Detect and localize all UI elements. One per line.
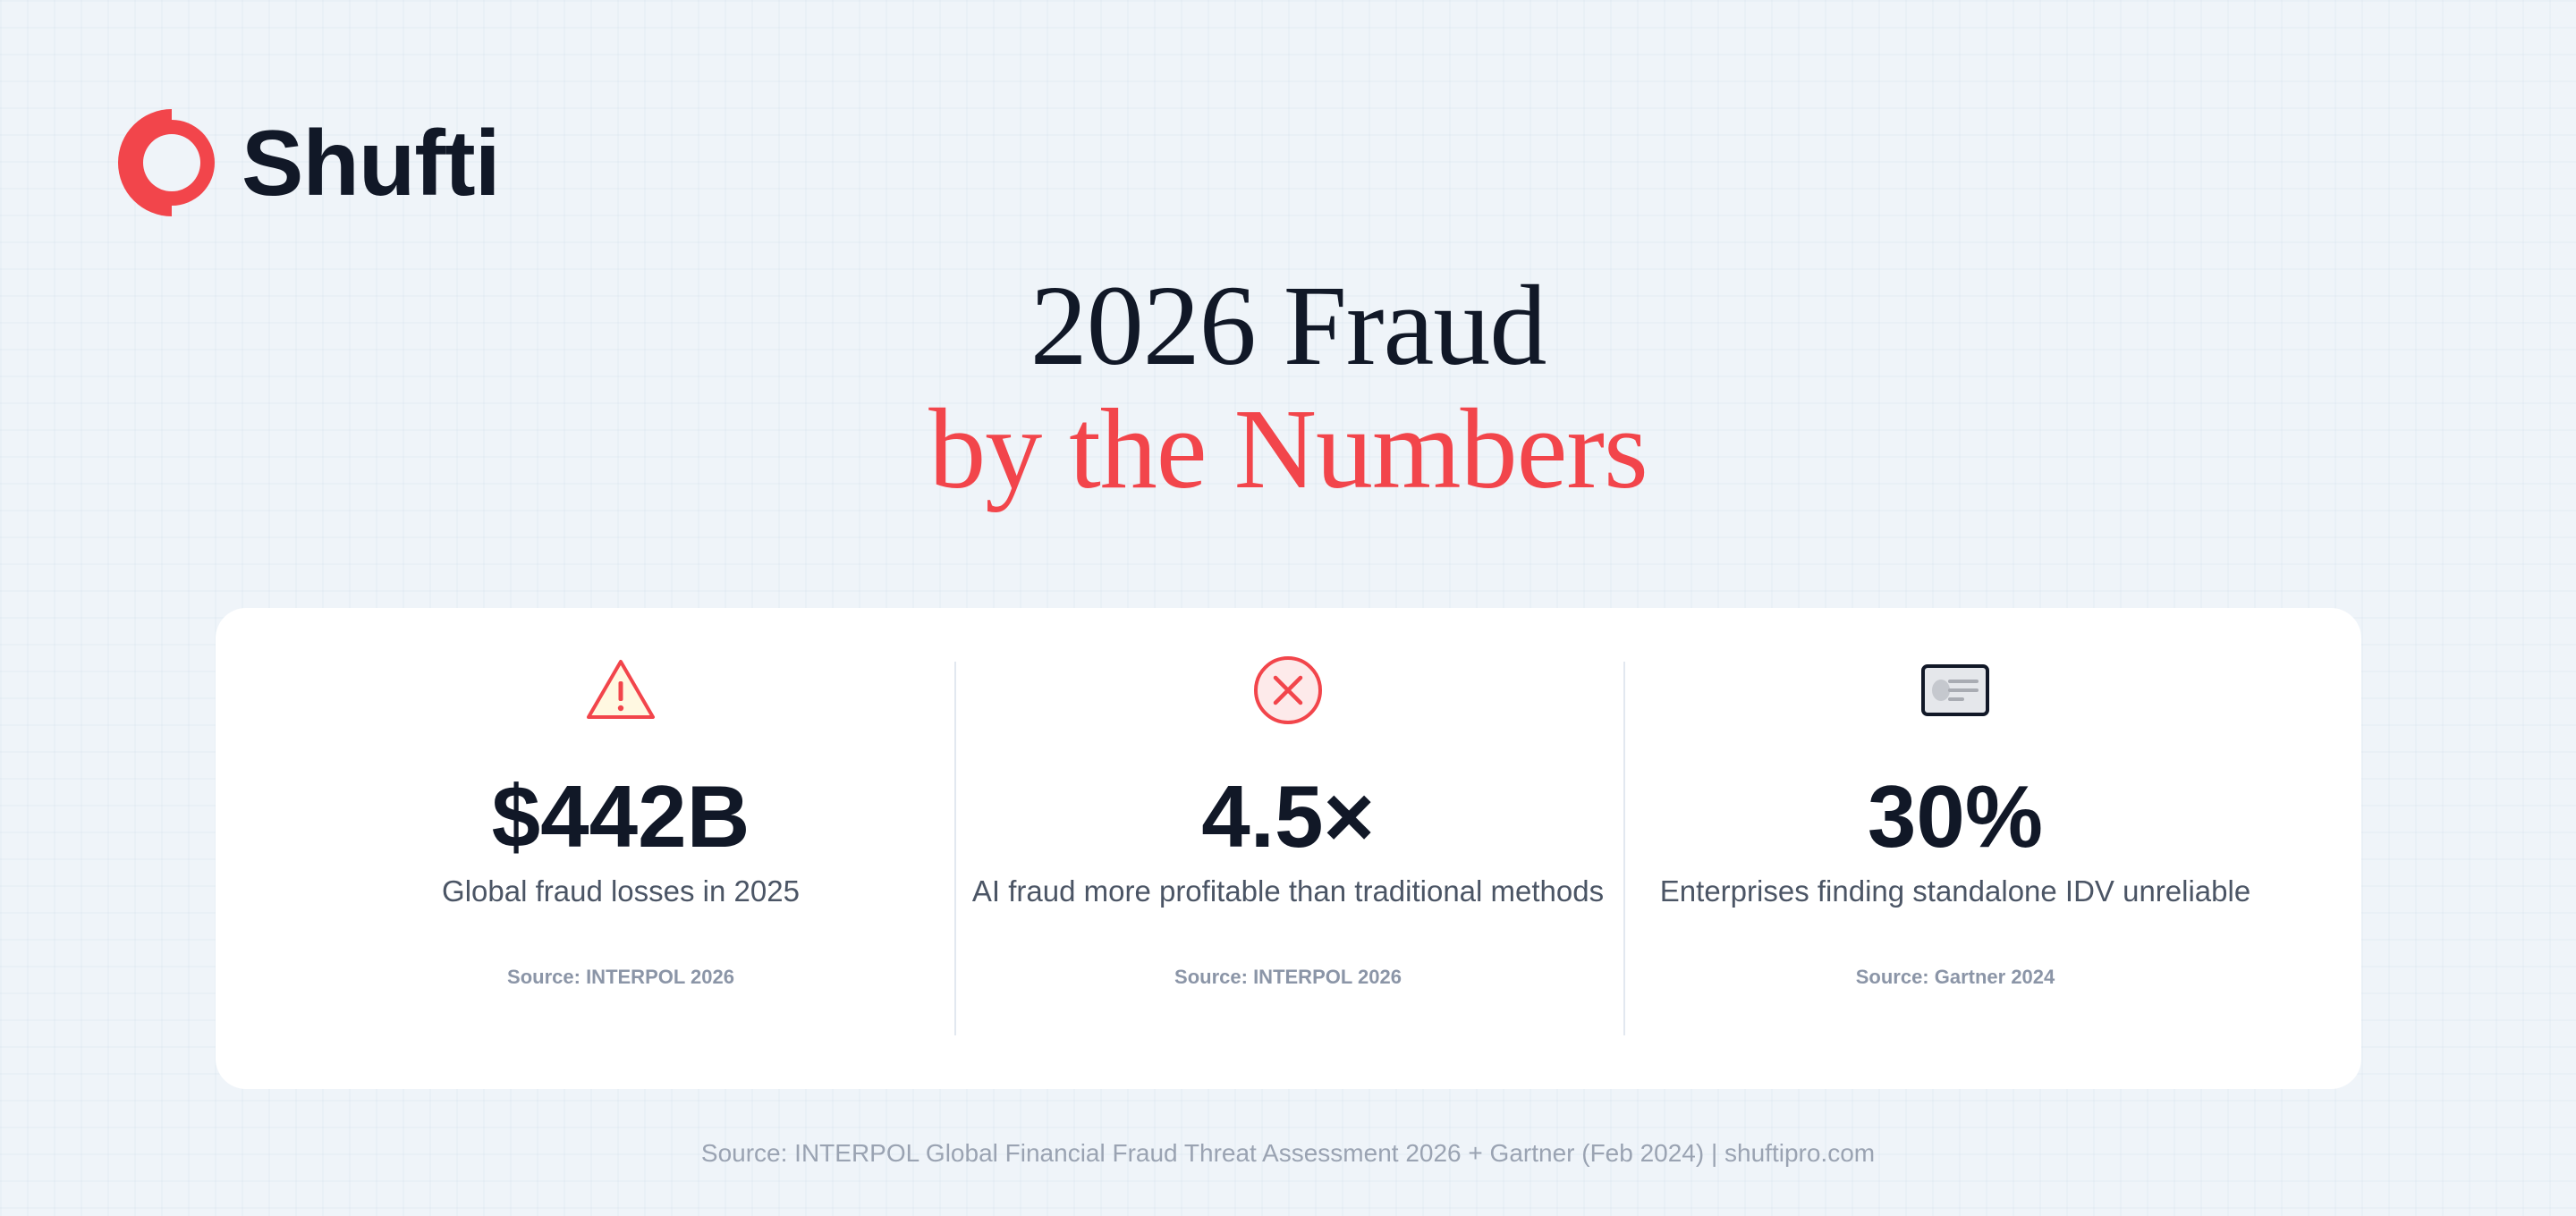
title: 2026 Fraud: [1030, 262, 1546, 389]
column: global losses: [442, 660, 800, 988]
panel: stats card: [216, 608, 2361, 1089]
source: Source: INTERPOL 2026: [507, 966, 734, 988]
divider: [1623, 662, 1625, 1035]
divider: [954, 662, 956, 1035]
icon: logo ring: [118, 109, 215, 216]
logo: [118, 109, 500, 216]
stat number: 4.5×: [1201, 767, 1375, 866]
icon: x circle: [1254, 656, 1322, 724]
stat number: $442B: [492, 767, 750, 866]
source: Source: Gartner 2024: [1856, 966, 2055, 988]
description: Global fraud losses in 2025: [442, 874, 800, 908]
description: AI fraud more profitable than traditional methods: [972, 874, 1604, 908]
icon: id card: [1921, 664, 1989, 716]
source: Source: INTERPOL 2026: [1174, 966, 1402, 988]
description: Enterprises finding standalone IDV unreliable: [1660, 874, 2250, 908]
footer source: Source: INTERPOL Global Financial Fraud Threat Assessment 2026 + Gartner (Feb 2024) | shuftipro.com: [701, 1139, 1875, 1167]
icon: warning: [587, 660, 655, 719]
logo text: Shufti: [242, 112, 500, 215]
column: IDV: [1660, 664, 2250, 988]
column: AI fraud: [972, 656, 1604, 988]
subtitle: by the Numbers: [928, 385, 1648, 512]
stat number: 30%: [1868, 767, 2043, 866]
